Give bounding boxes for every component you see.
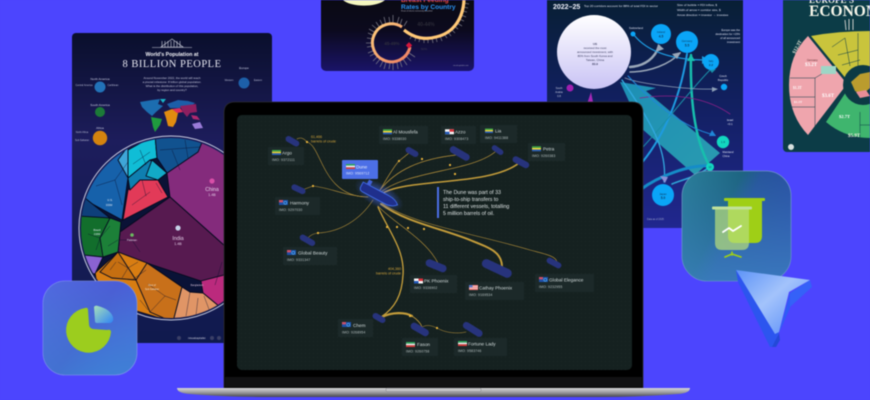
bubble: germany: Germany	[682, 39, 693, 43]
chart labels: 216M	[94, 232, 100, 236]
bubble: united states: 80% from South Korea and	[578, 54, 613, 58]
bubble: south korea	[706, 163, 714, 171]
poster intro: a pivotal milestone: 8 billion global population.	[143, 80, 202, 84]
bubble: japan: Japan	[659, 192, 667, 196]
blue north america cells	[86, 152, 128, 220]
poster title: World's Population at	[145, 52, 199, 58]
chart labels: 1.4B	[174, 242, 182, 246]
label: lia	[480, 125, 517, 143]
chart labels: Bangladesh	[191, 284, 204, 287]
laptop base	[177, 388, 690, 397]
chart labels: India	[172, 236, 184, 242]
bubble: czech republic	[718, 74, 729, 90]
chart labels: 1.4B	[208, 193, 216, 197]
label: azzo: Azzo	[455, 130, 466, 134]
bubble: mainland china	[717, 136, 734, 158]
label: pk phoenix: PK Phoenix	[424, 278, 449, 284]
sector: green	[826, 92, 870, 138]
label: harmony	[275, 197, 320, 215]
bubble: united states: announced investment, with	[577, 50, 613, 54]
label: cathay phoenix: Cathay Phoenix	[479, 286, 513, 290]
back screen	[728, 201, 762, 243]
volume note: 61,466 barrels: barrels of crude	[311, 140, 336, 144]
label: dune: Dune	[356, 164, 368, 170]
blue europe cells	[154, 138, 202, 172]
bubble: saudi arabia: South	[556, 86, 563, 90]
label: dune	[342, 160, 378, 179]
legend: north america: Central America	[75, 84, 93, 87]
label: harmony: Harmony	[290, 200, 310, 206]
bubble: united states: US	[593, 42, 597, 46]
legend: europe: Western	[225, 79, 234, 82]
label: fortune lady	[454, 338, 507, 356]
bubble: ireland: 4.5	[659, 34, 663, 38]
bubble: italy: 2.2	[709, 63, 713, 67]
bubble: czech republic: Republic	[718, 78, 729, 82]
bubble: italy	[703, 54, 719, 70]
poster legend: Width of arrow = corridor size, $	[677, 8, 721, 12]
pink south asia cell	[201, 275, 224, 306]
europe note: investment	[727, 40, 740, 44]
panel: rates by country poster	[321, 0, 474, 71]
india cell	[118, 197, 226, 281]
small ring segment	[372, 24, 410, 62]
legend: north america	[75, 77, 119, 92]
sector total: west: $12.3T	[792, 39, 804, 55]
label: lia: IMO: 9411388	[485, 136, 508, 140]
big corridor arrow	[620, 82, 720, 175]
icon: pantheon	[152, 39, 192, 48]
world map	[140, 99, 203, 132]
label: al mousfefa: Al Mousfefa	[393, 130, 418, 134]
europe globe	[843, 65, 870, 105]
israel label: <0.1	[727, 122, 733, 126]
label: global elegance: Global Elegance	[549, 278, 584, 282]
legend: north america: Caribbean	[107, 84, 119, 87]
bubble: saudi arabia	[555, 84, 574, 98]
bubble: japan: 5.0	[661, 196, 665, 200]
netherlands cell: $1.3T	[793, 86, 802, 90]
chart labels: U.S.	[107, 198, 113, 202]
germany cell label: Germany	[807, 58, 818, 62]
transfer routes	[297, 138, 557, 333]
green south america cells	[80, 216, 110, 257]
label: lia: Lia	[495, 128, 502, 134]
label: dune: IMO: 9569712	[346, 172, 369, 176]
germany cell value: $3.2T	[805, 63, 818, 68]
label: global beauty: Global Beauty	[298, 250, 328, 256]
sector: yellow	[811, 31, 870, 80]
callout text: The Dune was part of 33	[443, 190, 501, 196]
icon: cursor arrow	[736, 270, 812, 347]
pins	[845, 19, 853, 30]
label: global elegance	[535, 274, 594, 292]
bubble: germany	[676, 31, 698, 53]
legend: south america	[90, 103, 110, 117]
label: azzo: IMO: 9308473	[445, 137, 468, 141]
callout text: ship-to-ship transfers to	[443, 197, 498, 203]
pie small slice	[94, 306, 113, 323]
bubble: mainland china: China	[722, 154, 730, 158]
bubble: germany: 5.5	[685, 44, 689, 48]
laptop chin	[225, 377, 642, 387]
callout bar	[437, 187, 439, 218]
orange africa cells	[94, 252, 173, 318]
legend: africa: Africa	[96, 126, 104, 130]
pie large slice	[66, 308, 111, 353]
legend: africa: North Africa	[76, 131, 89, 134]
volume note: 61,466 barrels: 61,466	[311, 135, 322, 139]
label: pk phoenix	[410, 275, 457, 293]
bubble: mainland china: 1.9	[721, 140, 725, 144]
top-left ring fragment	[343, 0, 385, 6]
switzerland cell: $1.1T	[794, 100, 803, 104]
europe note: destination for >15%	[715, 32, 741, 36]
legend: europe: Europe	[239, 66, 249, 70]
middle east cell	[123, 180, 168, 220]
ring marker	[406, 42, 412, 49]
chart labels: Pakistan	[127, 238, 138, 242]
label: fortune lady: IMO: 9583746	[458, 349, 481, 353]
label: argo: Argo	[282, 150, 292, 156]
chart labels: China	[205, 187, 219, 193]
label: al mousfefa	[379, 126, 428, 144]
panel: world population poster	[72, 33, 272, 343]
bubble: switzerland	[629, 26, 643, 36]
bubble: italy: Italy	[709, 59, 714, 63]
ring labels: 40-44%	[417, 22, 435, 28]
bubble: united states	[557, 15, 631, 89]
panel: rates by country poster: 50%	[421, 47, 427, 51]
chart labels: 333M	[106, 203, 112, 207]
social footer: /visualcapitalist	[188, 336, 206, 340]
label: cathay phoenix	[465, 282, 524, 300]
china cell	[167, 143, 224, 244]
bubble: switzerland: Switzerland	[629, 26, 643, 30]
front screen	[715, 209, 749, 250]
label: azzo	[441, 126, 476, 144]
callout text: 5 million barrels of oil.	[443, 211, 494, 217]
panel: rates by country poster: 45-49%	[384, 41, 400, 46]
poster intro: by region and country?	[157, 88, 187, 92]
laptop notch	[386, 388, 481, 392]
poster headline: 8 BILLION PEOPLE	[122, 59, 222, 70]
europe note: Europe was the	[721, 28, 740, 32]
callout text: 11 different vessels, totalling	[443, 204, 509, 210]
label: global beauty: IMO: 9331347	[287, 258, 310, 262]
panel: rates by country poster: Rates by Country	[401, 4, 456, 11]
bubble: south korea: 10	[709, 166, 712, 169]
stand	[725, 252, 741, 257]
poster intro: Around November 2022, the world will reach	[144, 76, 201, 80]
bubble: czech republic: Czech	[719, 74, 727, 78]
label: petra	[528, 143, 565, 161]
large ring segment	[404, 0, 464, 38]
icon: presentation tile	[682, 171, 791, 281]
volume note: 404,360 barrels: 404,360	[388, 267, 401, 271]
screen: vessel network	[237, 115, 632, 370]
italy cell: $2.7T	[839, 114, 850, 119]
chart labels: Brazil	[94, 228, 101, 232]
chart labels: Sub-Saharan	[145, 288, 160, 291]
legend: north america: North America	[90, 77, 110, 81]
sector cell lines	[790, 33, 870, 138]
vessel: dune flagship	[350, 172, 408, 218]
peach africa cells	[174, 287, 218, 319]
panel: europe economy poster	[783, 0, 870, 152]
bubble: saudi arabia: 0.8	[557, 94, 561, 98]
label: global elegance: IMO: 9232955	[539, 285, 562, 289]
poster credit: visualcapitalist.com	[453, 64, 469, 67]
legend: europe: Eastern	[254, 79, 263, 82]
label: harmony: IMO: 9297030	[279, 208, 302, 212]
label: fason: Fason	[417, 342, 430, 347]
asia teal cells	[128, 160, 155, 192]
bubble: ireland	[651, 24, 671, 44]
france cell: $3.6T	[822, 94, 835, 99]
label: argo	[268, 147, 304, 165]
panel: fdi corridors poster	[547, 0, 743, 228]
laptop	[177, 102, 690, 397]
ring chart ticks	[366, 3, 469, 70]
bubble: ireland: Ireland	[657, 30, 666, 34]
purple oceania cell	[84, 255, 103, 274]
credit: Data as of 2025	[647, 218, 665, 221]
label: fortune lady: Fortune Lady	[468, 342, 496, 346]
label: chem: Chem	[353, 323, 366, 328]
vessels	[284, 135, 562, 338]
label: petra: Petra	[543, 146, 555, 152]
poster subtitle: Top 20 corridors account for 88% of total FDI in sector	[584, 4, 658, 8]
legend: europe	[225, 66, 263, 88]
label: pk phoenix: IMO: 9336902	[414, 286, 437, 290]
chart labels	[94, 178, 219, 291]
label: global beauty	[283, 247, 337, 265]
legend: africa	[75, 126, 107, 145]
bubble: japan	[652, 184, 674, 206]
poster year: 2022–25	[553, 4, 580, 11]
poster legend: Size of bubble = FDI inflow, $	[677, 3, 717, 7]
bubble: united states: 83.9	[592, 62, 598, 66]
poster legend: Arrow direction = investor → investee	[677, 13, 729, 17]
label: chem: IMO: 9268954	[342, 330, 365, 334]
label: argo: IMO: 9372111	[272, 158, 295, 162]
europe note: of all announced	[720, 36, 740, 40]
chart labels: Rest of	[148, 284, 156, 287]
corridor lines	[622, 35, 730, 190]
note box	[821, 66, 836, 74]
trend line	[723, 226, 741, 232]
legend: africa: Sub-Saharan	[75, 139, 90, 142]
voronoi population chart	[78, 134, 224, 322]
sub-cell lines	[88, 140, 222, 316]
icon: pie chart tile	[43, 281, 137, 375]
label: cathay phoenix: IMO: 9169534	[469, 293, 492, 297]
arrowheads	[586, 44, 718, 183]
legend: south america: South America	[90, 103, 110, 107]
bubble: saudi arabia: Arabia	[555, 90, 563, 94]
volume note: 404,360 barrels: barrels of crude	[376, 272, 401, 276]
laptop lid	[224, 102, 643, 388]
bubble: mainland china: Mainland	[723, 150, 734, 154]
label: chem	[338, 319, 373, 337]
route markers	[306, 141, 456, 329]
israel label: Israel	[727, 118, 734, 122]
bubble: united states: Taiwan, China	[586, 58, 604, 62]
label: al mousfefa: IMO: 9338030	[383, 137, 406, 141]
sector: pink	[789, 36, 847, 135]
label: fason	[402, 338, 438, 356]
label: petra: IMO: 9260383	[532, 154, 555, 158]
label: fason: IMO: 9260758	[406, 350, 429, 354]
sector total: south: $5.9T	[848, 134, 861, 139]
poster subtitle: Share of infants exclusively breastfed	[401, 10, 432, 12]
poster intro: What is the distribution of this population,	[146, 84, 199, 88]
bubble: united states: received the most	[584, 46, 607, 50]
footer logo	[788, 144, 794, 150]
